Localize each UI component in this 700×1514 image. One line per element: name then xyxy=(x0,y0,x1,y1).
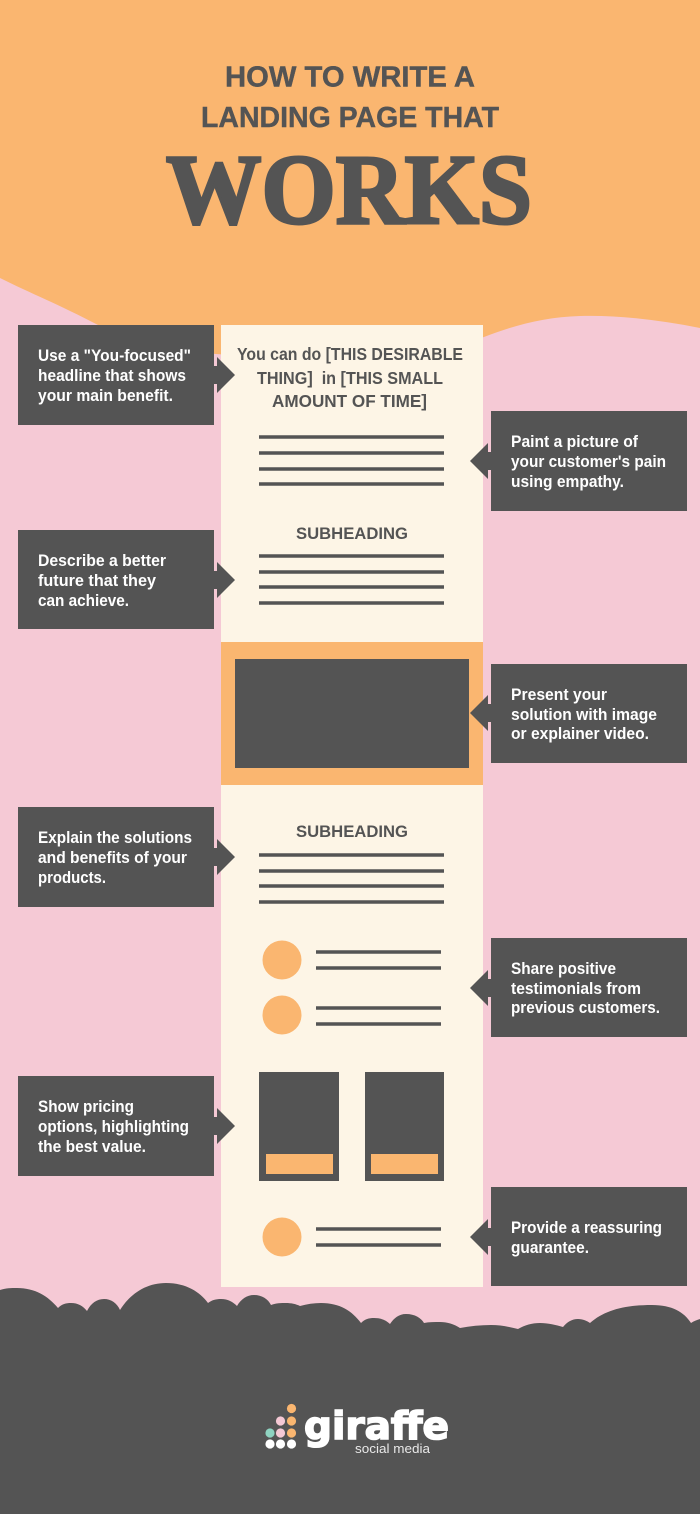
headline xyxy=(237,344,463,411)
guarantee xyxy=(262,1218,441,1256)
icon: dots xyxy=(265,1404,296,1449)
callout: pricing: Show pricing xyxy=(38,1098,134,1116)
callout: pricing: options, highlighting xyxy=(38,1118,189,1136)
title: WORKS xyxy=(166,134,532,245)
callout: testimonials: Share positive xyxy=(511,960,616,978)
logo tagline: social media xyxy=(355,1442,430,1456)
headline: AMOUNT OF TIME] xyxy=(272,391,427,411)
callout: testimonials: testimonials from xyxy=(511,980,641,998)
text lines: intro xyxy=(259,437,444,484)
callout: future: future that they xyxy=(38,572,157,590)
callout: pain: using empathy. xyxy=(511,473,624,491)
callout: solution xyxy=(470,664,687,763)
callout: pricing: the best value. xyxy=(38,1138,146,1156)
callout: headline xyxy=(18,325,235,425)
title xyxy=(166,62,532,245)
callout: solution: Present your xyxy=(511,686,608,704)
callout: guarantee: Provide a reassuring xyxy=(511,1219,662,1237)
callout: pain: Paint a picture of xyxy=(511,433,638,451)
callout: testimonials xyxy=(470,938,687,1037)
callout: pain xyxy=(470,411,687,511)
callout: benefits: products. xyxy=(38,869,106,887)
callout: pricing xyxy=(18,1076,235,1176)
callout: solution: solution with image xyxy=(511,706,657,724)
landing page mockup xyxy=(221,325,483,1287)
callout: testimonials: previous customers. xyxy=(511,999,660,1017)
title: LANDING PAGE THAT xyxy=(201,102,499,134)
headline: THING] in [THIS SMALL xyxy=(257,368,443,388)
page background xyxy=(221,325,483,1287)
pricing option 2 xyxy=(365,1072,444,1181)
dark footer with cloud edge xyxy=(0,1283,700,1514)
logo: giraffe social media xyxy=(265,1404,449,1456)
image or video band xyxy=(221,642,483,785)
callout: headline: your main benefit. xyxy=(38,387,173,405)
pricing option 1 xyxy=(259,1072,339,1181)
callout: solution: or explainer video. xyxy=(511,725,649,743)
callout: guarantee: guarantee. xyxy=(511,1239,589,1257)
callout: future: Describe a better xyxy=(38,552,167,570)
logo wordmark: giraffe xyxy=(304,1404,449,1448)
testimonial 2 xyxy=(262,996,441,1034)
callout: benefits xyxy=(18,807,235,907)
orange header wave xyxy=(0,0,700,358)
text lines: benefits xyxy=(259,855,444,902)
callout: guarantee xyxy=(470,1187,687,1286)
title: HOW TO WRITE A xyxy=(225,62,475,94)
callout: benefits: and benefits of your xyxy=(38,849,188,867)
testimonial 1 xyxy=(262,940,441,980)
callout: future xyxy=(18,530,235,629)
text lines: future xyxy=(259,556,444,603)
headline: You can do [THIS DESIRABLE xyxy=(237,344,463,364)
callout: future: can achieve. xyxy=(38,592,129,610)
callout: headline: Use a "You-focused" xyxy=(38,347,191,365)
callout: headline: headline that shows xyxy=(38,367,186,385)
callout: benefits: Explain the solutions xyxy=(38,829,192,847)
subheading 1: SUBHEADING xyxy=(296,524,408,543)
subheading 2: SUBHEADING xyxy=(296,822,408,841)
callout: pain: your customer's pain xyxy=(511,453,666,471)
